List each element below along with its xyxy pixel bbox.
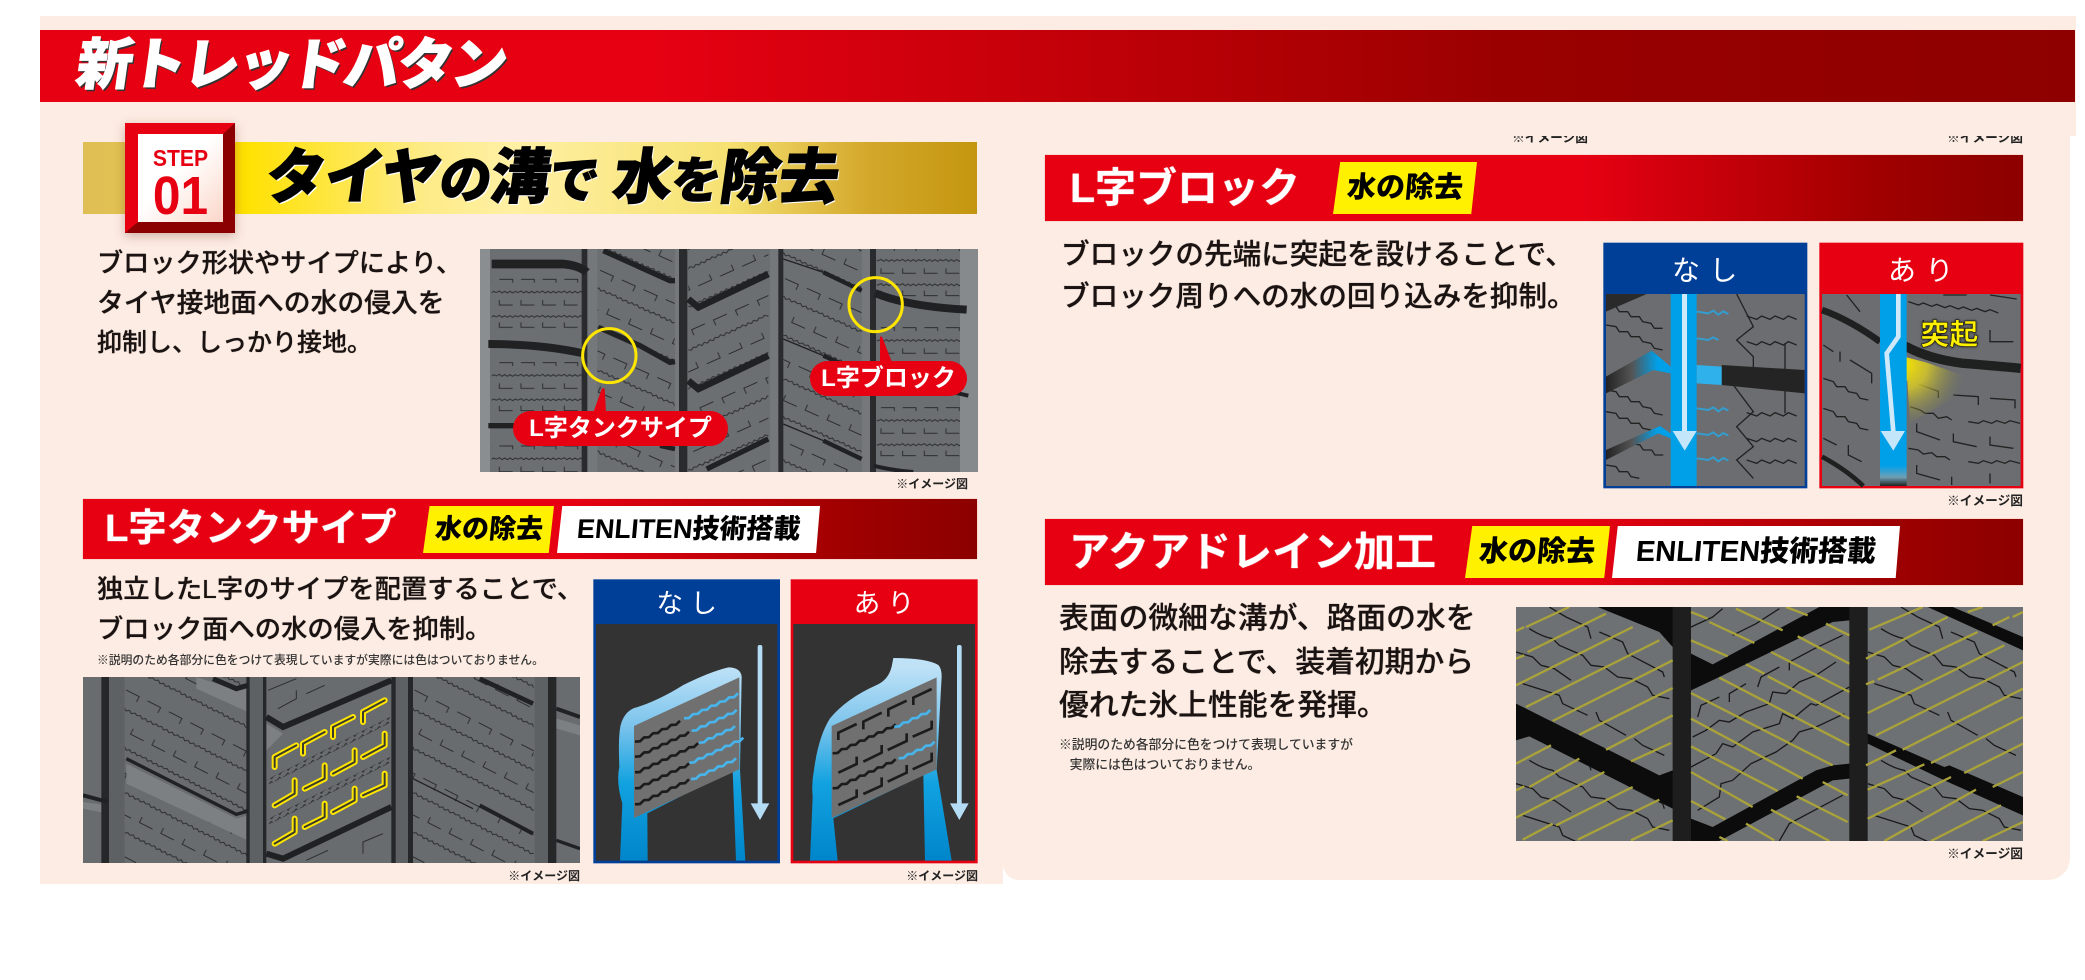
caption: image note: ※イメージ図 xyxy=(906,869,978,883)
section title: L字ブロック xyxy=(1070,165,1300,211)
panel: peach background right xyxy=(1003,16,2070,880)
callout label: L字ブロック: L字ブロック xyxy=(821,365,956,392)
header band xyxy=(40,30,2075,102)
text: L block description: ブロック周りへの水の回り込みを抑制。 xyxy=(1061,281,1576,313)
main title: 新トレッドパタン xyxy=(73,33,509,96)
tag: ENLITEN: ENLITEN技術搭載 xyxy=(575,514,802,544)
tag: water removal xyxy=(423,506,554,553)
note: color disclaimer: ※説明のため各部分に色をつけて表現していますが実際には色はついておりません。 xyxy=(97,653,544,667)
comparison diagrams: L block without / with xyxy=(1603,242,2024,488)
tag: ENLITEN: ENLITEN技術搭載 xyxy=(1635,536,1877,568)
tag: water removal: 水の除去 xyxy=(433,514,544,544)
callout label: L字タンクサイプ xyxy=(513,411,728,446)
tire photo: aqua drain micro grooves xyxy=(1516,607,2023,841)
yellow micro grooves xyxy=(1516,607,2023,841)
section bar: L字タンクサイプ xyxy=(83,499,977,559)
callout label: L字タンクサイプ: L字タンクサイプ xyxy=(529,415,712,442)
text: aqua drain description xyxy=(1059,602,1476,722)
step heading text: タイヤの溝で 水を除去 xyxy=(262,144,843,211)
caption: image note: ※イメージ図 xyxy=(896,477,968,491)
caption: image note: ※イメージ図 xyxy=(1947,494,2023,508)
section title: アクアドレイン加工 xyxy=(1069,529,1436,575)
tire photo: tread overview with callouts xyxy=(480,249,978,472)
text: aqua drain description: 除去することで、装着初期から xyxy=(1059,646,1474,678)
gold band: step 1 heading xyxy=(83,142,977,214)
line 2: タイヤ接地面への水の侵入を xyxy=(97,288,445,318)
panel: peach background left xyxy=(40,16,1003,884)
caption: image note: ※イメージ図 xyxy=(508,869,580,883)
caption: image note: ※イメージ図 xyxy=(1947,847,2023,861)
panel: without (なし) xyxy=(1603,243,1807,488)
step label: STEP xyxy=(153,145,208,171)
step 01 badge xyxy=(125,123,235,233)
tag: ENLITEN xyxy=(557,506,820,553)
line 3: 抑制し、しっかり接地。 xyxy=(97,329,372,357)
text: L block description xyxy=(1061,238,1576,313)
callout label: L字ブロック xyxy=(810,361,967,396)
tire photo: L-shaped tank sipes highlighted xyxy=(83,677,580,863)
panel: with (あり) xyxy=(1819,243,2023,488)
note: color disclaimer xyxy=(1059,737,1353,772)
step number: 01 xyxy=(153,166,208,226)
panel: without (なし): なし xyxy=(1672,255,1747,286)
text: aqua drain description: 表面の微細な溝が、路面の水を xyxy=(1059,602,1476,635)
tag: ENLITEN xyxy=(1612,526,1900,578)
tag: water removal: 水の除去 xyxy=(1346,172,1464,204)
section bar: L字ブロック xyxy=(1045,155,2023,221)
text: tank sipe description: 独立したL字のサイプを配置することで、 xyxy=(97,574,583,604)
text: tank sipe description: ブロック面への水の侵入を抑制。 xyxy=(97,614,491,644)
text: aqua drain description: 優れた氷上性能を発揮。 xyxy=(1059,689,1387,722)
line 1: ブロック形状やサイプにより、 xyxy=(97,248,462,278)
comparison diagrams: tank sipe without / with xyxy=(593,579,978,864)
panel: with (あり): あり xyxy=(854,588,922,618)
sipes: middle block waves xyxy=(1691,609,1849,841)
panel: without (なし) xyxy=(593,579,780,863)
sipes: left and right block waves xyxy=(1516,607,2022,841)
callout marker: L字タンクサイプ xyxy=(583,329,636,412)
panel: with (あり): 突起 xyxy=(1920,318,1978,351)
highlight: yellow L sipes xyxy=(275,700,385,844)
text: tank sipe description xyxy=(97,574,583,644)
section title: L字タンクサイプ xyxy=(105,507,396,550)
section bar: アクアドレイン加工 xyxy=(1045,519,2023,585)
callout marker: L字ブロック xyxy=(849,278,902,362)
panel: with (あり) xyxy=(791,579,978,863)
note: color disclaimer: ※説明のため各部分に色をつけて表現していますが xyxy=(1059,737,1353,752)
text: L block description: ブロックの先端に突起を設けることで、 xyxy=(1061,239,1574,271)
note: color disclaimer: 実際には色はついておりません。 xyxy=(1070,757,1260,772)
text: step 1 description xyxy=(97,248,462,357)
tag: water removal: 水の除去 xyxy=(1478,536,1597,568)
tag: water removal xyxy=(1465,526,1610,578)
panel: without (なし): なし xyxy=(656,588,724,618)
panel: with (あり): あり xyxy=(1888,255,1963,286)
tag: water removal xyxy=(1333,162,1477,214)
panel: peach background top right xyxy=(1003,16,2076,136)
